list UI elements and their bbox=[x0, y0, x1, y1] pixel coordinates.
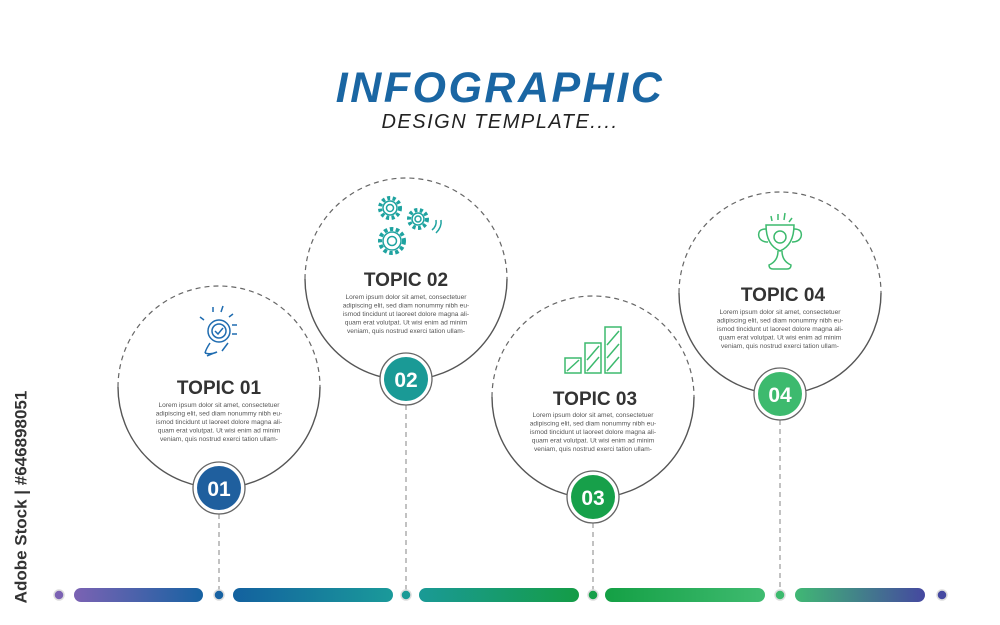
text block: Lorem ipsum dolor sit amet, consectetuer bbox=[533, 412, 654, 419]
text block bbox=[530, 412, 656, 453]
badge 03: 03 bbox=[581, 487, 605, 510]
text block bbox=[156, 402, 282, 443]
text block: quam erat volutpat. Ut wisi enim ad minim bbox=[158, 428, 281, 434]
text block: adipiscing elit, sed diam nonummy nibh eu- bbox=[343, 302, 469, 310]
badge 02: 02 bbox=[394, 369, 418, 392]
text block: quam erat volutpat. Ut wisi enim ad minim bbox=[345, 320, 468, 326]
icon: trophy bbox=[759, 213, 801, 269]
panel: topic 03 bbox=[492, 296, 694, 523]
text block: adipiscing elit, sed diam nonummy nibh eu- bbox=[156, 410, 282, 418]
text block: Lorem ipsum dolor sit amet, consectetuer bbox=[720, 309, 841, 316]
text block: adipiscing elit, sed diam nonummy nibh eu- bbox=[717, 318, 843, 324]
text block: veniam, quis nostrud exerci tation ullam- bbox=[721, 343, 839, 350]
timeline bbox=[54, 588, 947, 602]
badge 02 bbox=[380, 353, 432, 405]
icon: light bulb bbox=[200, 306, 237, 356]
subtitle: DESIGN TEMPLATE.... bbox=[381, 111, 619, 133]
text block: ismod tincidunt ut laoreet dolore magna ali- bbox=[530, 429, 656, 436]
panel: topic 02 bbox=[305, 178, 507, 405]
badge 03 bbox=[567, 471, 619, 523]
icon: bar chart bbox=[565, 327, 621, 373]
text block bbox=[717, 309, 843, 350]
text block: Lorem ipsum dolor sit amet, consectetuer bbox=[159, 402, 280, 409]
title: INFOGRAPHIC bbox=[336, 64, 664, 112]
icon: gears bbox=[380, 198, 441, 253]
heading: TOPIC 04 bbox=[741, 285, 825, 306]
watermark id: Adobe Stock | #646898051 bbox=[11, 391, 30, 603]
badge 01: 01 bbox=[207, 478, 231, 501]
heading: TOPIC 02 bbox=[364, 270, 448, 291]
text block: ismod tincidunt ut laoreet dolore magna ali- bbox=[156, 419, 282, 426]
text block bbox=[343, 294, 469, 335]
connector dashed lines bbox=[219, 405, 780, 590]
text block: ismod tincidunt ut laoreet dolore magna ali- bbox=[343, 311, 469, 318]
panel: topic 04 bbox=[679, 192, 881, 420]
text block: quam erat volutpat. Ut wisi enim ad minim bbox=[719, 334, 842, 342]
text block: veniam, quis nostrud exerci tation ullam- bbox=[347, 328, 465, 335]
badge 01 bbox=[193, 462, 245, 514]
text block: veniam, quis nostrud exerci tation ullam- bbox=[534, 446, 652, 453]
heading: TOPIC 01 bbox=[177, 378, 261, 399]
text block: quam erat volutpat. Ut wisi enim ad minim bbox=[532, 438, 655, 444]
badge 04: 04 bbox=[768, 384, 792, 407]
badge 04 bbox=[754, 368, 806, 420]
text block: veniam, quis nostrud exerci tation ullam- bbox=[160, 436, 278, 443]
panel: topic 01 bbox=[118, 286, 320, 514]
text block: adipiscing elit, sed diam nonummy nibh eu- bbox=[530, 420, 656, 428]
text block: ismod tincidunt ut laoreet dolore magna ali- bbox=[717, 326, 843, 333]
text block: Lorem ipsum dolor sit amet, consectetuer bbox=[346, 294, 467, 301]
heading: TOPIC 03 bbox=[553, 389, 637, 410]
title bbox=[336, 64, 664, 133]
